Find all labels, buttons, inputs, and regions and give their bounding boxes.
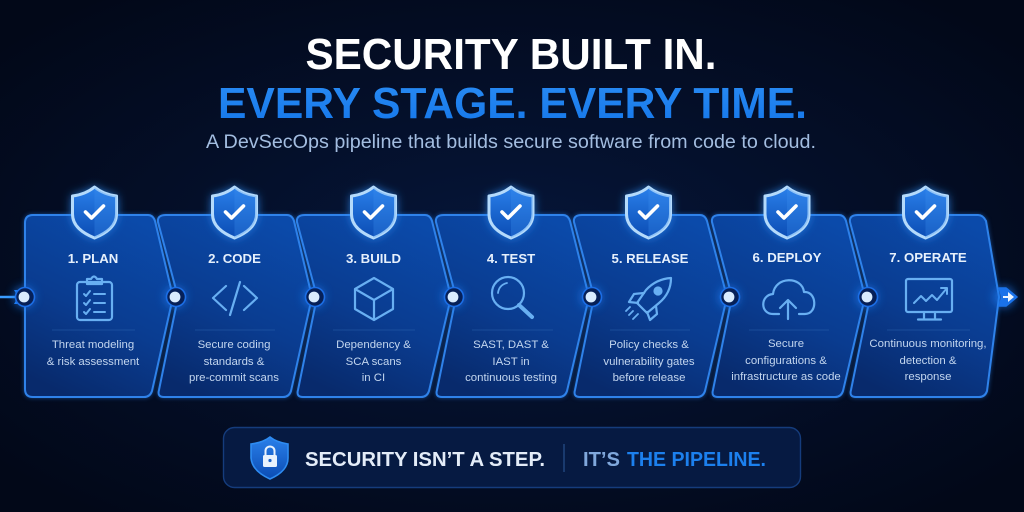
- description: & risk assessment: [47, 356, 140, 368]
- panel: 5 release: [574, 215, 727, 397]
- icon: shield 3: [352, 187, 396, 238]
- panel: 2 code: [158, 215, 312, 397]
- description: Policy checks &: [609, 339, 689, 351]
- description: Threat modeling: [52, 339, 134, 351]
- description: SAST, DAST &: [473, 339, 549, 351]
- icon: code brackets: [213, 282, 257, 315]
- heading: 6. deploy: 6. DEPLOY: [753, 250, 822, 265]
- description: [731, 338, 841, 383]
- callout banner: [224, 428, 800, 488]
- description: [465, 339, 557, 384]
- icon: shield 1: [72, 187, 116, 238]
- icon: rocket: [626, 278, 671, 320]
- description: [869, 338, 987, 383]
- description: in CI: [362, 372, 385, 384]
- subtitle: A DevSecOps pipeline that builds secure software from code to cloud.: [206, 131, 816, 153]
- description: response: [905, 371, 951, 383]
- description: Continuous monitoring,: [869, 338, 987, 350]
- icon: cube: [355, 278, 393, 320]
- panel: 7 operate: [850, 215, 999, 397]
- callout text right: IT’S: [583, 448, 620, 471]
- panel: 4 test: [436, 215, 589, 397]
- panel: 3 build: [297, 215, 451, 397]
- description: vulnerability gates: [603, 356, 695, 368]
- description: before release: [613, 372, 685, 384]
- description: detection &: [900, 355, 957, 367]
- description: [603, 339, 695, 384]
- description: infrastructure as code: [731, 371, 841, 383]
- icon: shield 2: [212, 187, 256, 238]
- heading: 1. plan: 1. PLAN: [68, 251, 118, 266]
- heading: 2. code: 2. CODE: [208, 251, 261, 266]
- connector: start: [0, 287, 34, 307]
- callout text left: SECURITY ISN’T A STEP.: [305, 448, 545, 471]
- icon: cloud upload: [763, 280, 814, 319]
- description: IAST in: [492, 356, 530, 368]
- panel: 6 deploy: [712, 215, 865, 397]
- description: standards &: [204, 356, 265, 368]
- icon: clipboard: [77, 276, 112, 320]
- heading: 3. build: 3. BUILD: [346, 251, 401, 266]
- description: pre-commit scans: [189, 372, 279, 384]
- description: Secure: [768, 338, 804, 350]
- connector: plan to code: [149, 287, 186, 307]
- description: configurations &: [745, 355, 827, 367]
- title: SECURITY BUILT IN.: [306, 30, 716, 79]
- title: EVERY STAGE. EVERY TIME.: [218, 79, 807, 128]
- icon: shield 6: [765, 187, 809, 238]
- icon: shield lock: [251, 437, 288, 479]
- connector: test to release: [565, 287, 602, 307]
- description: Dependency &: [336, 339, 411, 351]
- arrow: end: [980, 287, 1017, 307]
- shields row: [72, 187, 948, 238]
- description: [47, 339, 140, 368]
- icon: shield 7: [904, 187, 948, 238]
- heading: 4. test: 4. TEST: [487, 251, 535, 266]
- heading: 7. operate: 7. OPERATE: [889, 250, 967, 265]
- description: SCA scans: [346, 356, 402, 368]
- icon: shield 5: [626, 187, 670, 238]
- title: [218, 30, 807, 128]
- description: continuous testing: [465, 372, 557, 384]
- description: [189, 339, 279, 384]
- icon: monitor chart: [906, 279, 952, 320]
- heading: 5. release: 5. RELEASE: [612, 251, 689, 266]
- pipeline connectors: [0, 287, 1017, 307]
- panel: 1 plan: [25, 215, 173, 397]
- connector: deploy to operate: [841, 287, 878, 307]
- description: [336, 339, 411, 384]
- description: Secure coding: [198, 339, 270, 351]
- connector: build to test: [427, 287, 464, 307]
- icon: shield 4: [489, 187, 533, 238]
- connector: code to build: [288, 287, 324, 307]
- callout text right: THE PIPELINE.: [627, 448, 766, 471]
- connector: release to deploy: [703, 287, 740, 307]
- icon: magnifier: [492, 277, 532, 317]
